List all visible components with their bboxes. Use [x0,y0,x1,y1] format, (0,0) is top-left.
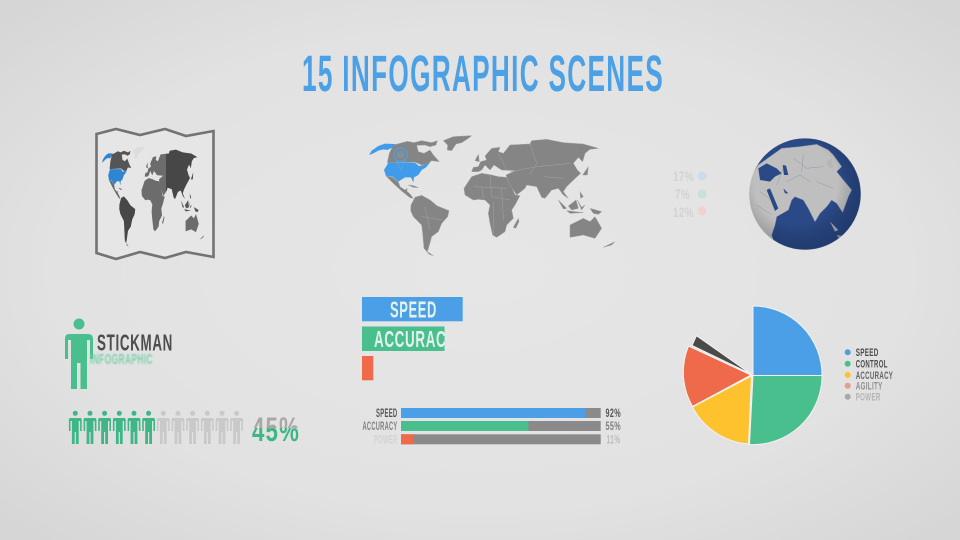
globe: inland seas [758,163,788,211]
map: borders [422,144,570,233]
globe: ocean [749,138,861,250]
panel: pie legend [845,347,893,404]
progress: accuracy: ACCURACY [362,421,398,433]
progress: accuracy [362,421,621,433]
legend: power: POWER [856,392,881,404]
legend: control: CONTROL [856,358,888,370]
panel: stickman title [65,318,173,389]
panel: faded percent legend [673,168,706,220]
panel: large label bars [362,296,463,380]
icon: location pin [394,148,407,170]
map: Mexico and Central America [386,176,418,198]
map frame [96,129,214,259]
map: Eurasia [472,139,598,198]
panel: world map [369,136,615,256]
bar: red [362,356,373,380]
percent value [252,417,298,442]
panel: folded map [96,129,214,259]
progress: power: POWER [374,434,398,446]
progress: power: 11% [606,434,620,446]
map: South America [411,195,449,256]
percent value: 45% [252,412,300,445]
map: Eurasia east half [166,150,198,199]
globe: islands [827,159,842,238]
map: United States highlighted [369,144,430,182]
panel: globe [747,138,861,250]
progress: speed: 92% [606,408,621,420]
panel: pie chart [683,306,822,445]
globe: land [747,144,852,245]
legend: accuracy: ACCURACY [856,370,893,382]
bar: accuracy: ACCURACY [374,326,456,352]
progress: speed: SPEED [376,408,398,420]
icons: six gray figures [157,411,243,444]
heading: stickman: STICKMAN [97,330,173,356]
panel: stickman percent row [68,410,298,444]
blurred subtitle: INFOGRAPHIC [90,351,153,368]
slice: power [692,336,751,374]
legend: speed: SPEED [856,347,879,359]
legend: agility: AGILITY [856,380,883,392]
legend row 12%: 12% [673,204,694,220]
progress: speed [376,408,621,420]
icon: large stickman [65,318,93,389]
map: Southeast Asia islands [558,192,602,214]
icons: six green figures [69,411,155,444]
slice: control [750,376,822,445]
legend row 7%: 7% [675,186,690,202]
slice: accuracy [692,376,752,444]
progress: power [374,434,620,446]
bar: speed: SPEED [390,296,437,322]
globe: borders [757,155,833,215]
map: Africa [464,173,520,237]
progress: accuracy: 55% [606,421,621,433]
legend row 17%: 17% [673,168,694,184]
map: Greenland [443,136,472,151]
percent value: 45% [252,415,300,448]
icon: world map in frame [102,147,204,247]
panel: progress bars [362,408,621,446]
map: Eurasia west half [144,154,166,196]
slice: agility [683,346,751,406]
map: Canada [387,141,439,165]
map: Australia [570,217,615,247]
slice: speed [753,306,822,376]
